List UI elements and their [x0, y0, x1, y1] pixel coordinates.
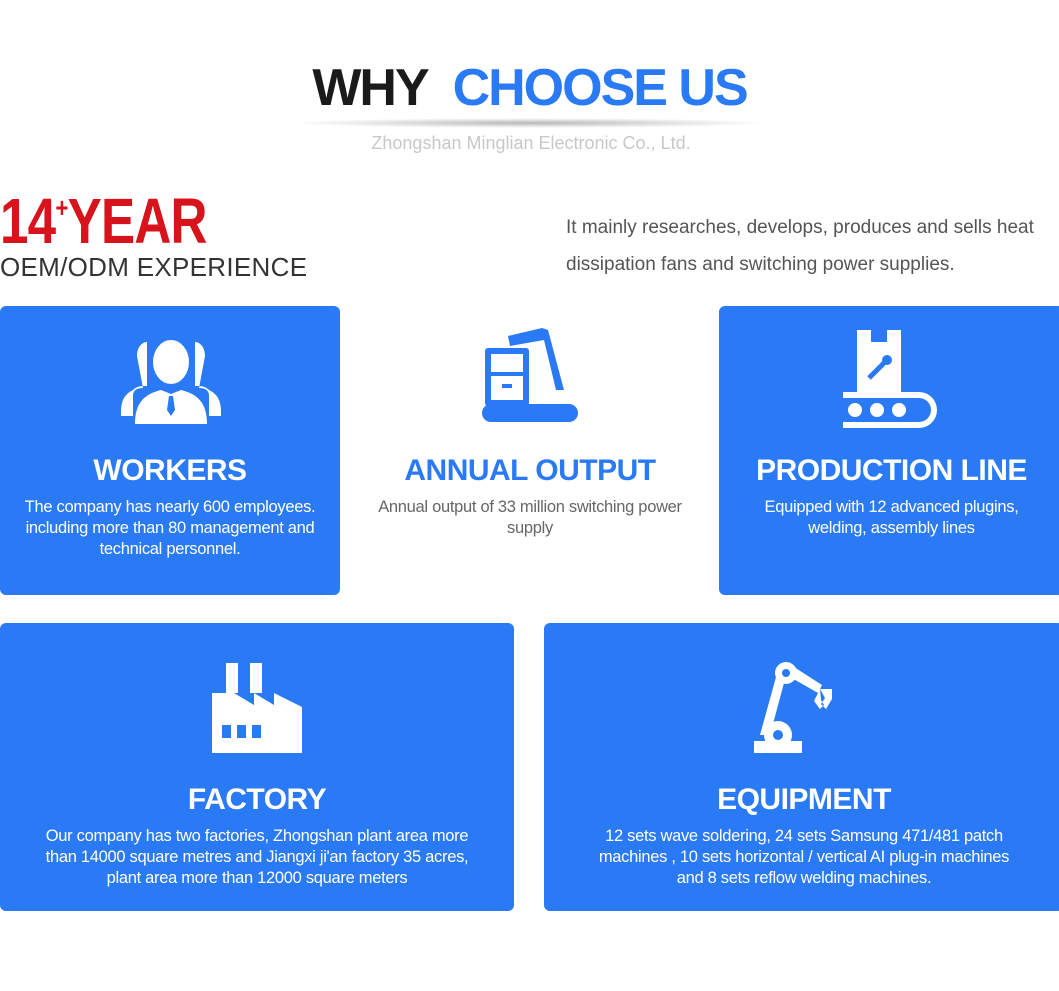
experience badge: 14+YEAR	[0, 185, 207, 257]
text: plant area more than 12000 square meters	[107, 869, 407, 887]
text: The company has nearly 600 employees.	[25, 498, 315, 516]
text	[25, 498, 315, 558]
text	[46, 827, 468, 887]
text: machines , 10 sets horizontal / vertical AI plug-in machines	[599, 848, 1009, 866]
subtitle: Zhongshan Minglian Electronic Co., Ltd.	[371, 133, 691, 153]
experience badge: OEM/ODM EXPERIENCE	[0, 252, 307, 282]
heading: PRODUCTION LINE	[756, 454, 1027, 487]
title: WHY CHOOSE US	[312, 59, 747, 117]
text: Our company has two factories, Zhongshan plant area more	[46, 827, 468, 845]
icon: production line	[843, 330, 937, 428]
text	[378, 498, 682, 537]
text: supply	[507, 519, 553, 537]
panel: factory	[0, 623, 514, 911]
text: Annual output of 33 million switching power	[378, 498, 682, 516]
icon: machine	[482, 328, 578, 422]
heading: ANNUAL OUTPUT	[404, 454, 656, 487]
intro text: It mainly researches, develops, produces and sells heat	[566, 217, 1034, 238]
text: than 14000 square metres and Jiangxi ji'an factory 35 acres,	[46, 848, 468, 866]
experience badge	[0, 185, 307, 282]
heading: WORKERS	[93, 454, 247, 487]
panel: production line	[719, 306, 1059, 595]
text: 12 sets wave soldering, 24 sets Samsung 471/481 patch	[605, 827, 1003, 845]
icon: workers	[121, 340, 221, 424]
icon: robot arm	[754, 662, 832, 753]
text: Equipped with 12 advanced plugins,	[764, 498, 1018, 516]
panel: equipment	[544, 623, 1059, 911]
text: technical personnel.	[100, 540, 240, 558]
intro text	[566, 217, 1034, 275]
heading: FACTORY	[188, 783, 326, 816]
panel: annual output	[378, 328, 682, 537]
text: including more than 80 management and	[26, 519, 314, 537]
intro text: dissipation fans and switching power supplies.	[566, 254, 955, 275]
text: welding, assembly lines	[808, 519, 975, 537]
panel: workers	[0, 306, 340, 595]
text: and 8 sets reflow welding machines.	[677, 869, 931, 887]
title shadow line	[290, 118, 770, 128]
heading: EQUIPMENT	[717, 783, 891, 816]
icon: factory	[212, 663, 302, 753]
text	[599, 827, 1009, 887]
text	[764, 498, 1018, 537]
